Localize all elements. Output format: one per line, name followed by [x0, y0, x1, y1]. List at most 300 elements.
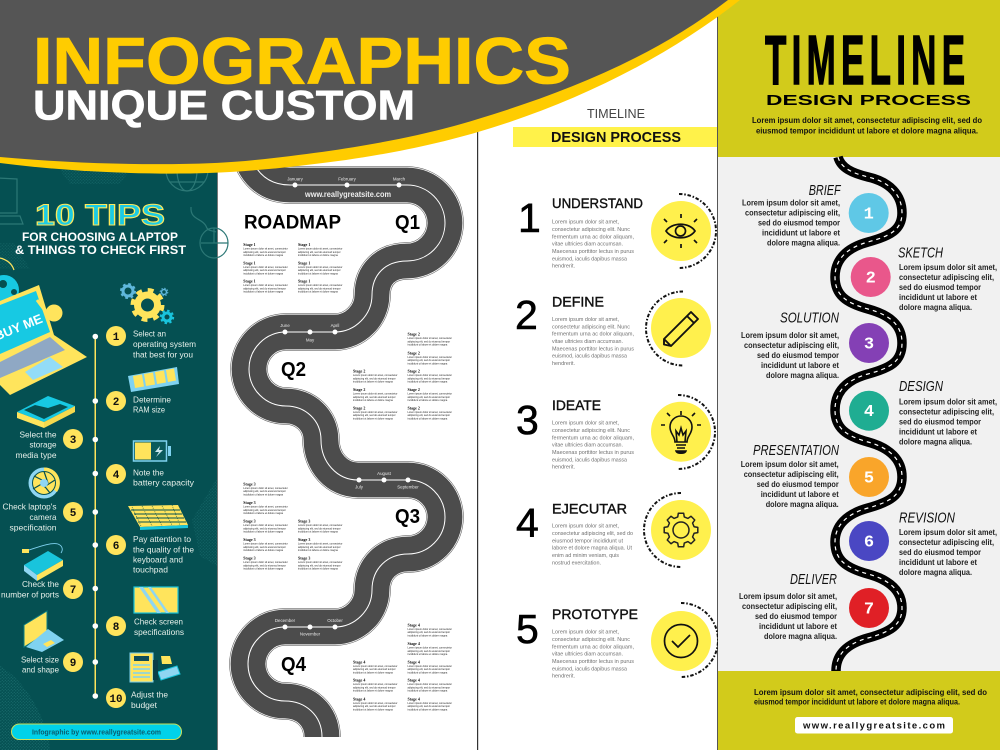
- Q4 stages: incididunt ut labore et dolore magna: [353, 690, 393, 693]
- step 2: 2: [113, 397, 119, 409]
- Q3 stages: incididunt ut labore et dolore magna: [243, 568, 284, 571]
- intro text: eiusmod tempor incididunt ut labore et dolore magna aliqua.: [756, 126, 978, 136]
- step: define: vitae ultricies diam accumsan.: [552, 339, 623, 345]
- Q4 months: [275, 618, 343, 636]
- Q1 stages: incididunt ut labore et dolore magna: [243, 291, 284, 294]
- step 9: and shape: [22, 666, 59, 675]
- step 1: operating system: [133, 340, 196, 349]
- Q3 stages: Stage 3: [243, 537, 256, 542]
- Q1 stages: incididunt ut labore et dolore magna: [298, 291, 338, 294]
- step: solution: 3: [864, 336, 874, 354]
- step: ejecutar: consectetur adipiscing elit, sed do: [552, 531, 633, 537]
- Q3 stages: adipiscing elit, sed do eiusmod tempor: [243, 527, 286, 530]
- website label: www.reallygreatsite.com: [304, 190, 391, 199]
- step: deliver: consectetur adipiscing elit,: [742, 602, 837, 611]
- Q4 stages: adipiscing elit, sed do eiusmod tempor: [408, 705, 450, 708]
- Q1 months: February: [338, 176, 357, 182]
- step: presentation: incididunt ut labore et: [761, 490, 839, 499]
- footer pill: [12, 724, 182, 740]
- Q2 stages: Lorem ipsum dolor sit amet, consectetur: [353, 374, 398, 377]
- step 6: the quality of the: [133, 545, 194, 554]
- Q4 stages: adipiscing elit, sed do eiusmod tempor: [408, 668, 450, 671]
- Q1 months: March: [393, 176, 406, 182]
- Q3 stages: adipiscing elit, sed do eiusmod tempor: [243, 490, 286, 493]
- Q4 stages: Lorem ipsum dolor sit amet, consectetur: [408, 646, 452, 650]
- icon: outline mouse decoration: [191, 207, 228, 258]
- step: understand: vitae ultricies diam accumsan.: [552, 242, 623, 248]
- Q3 stages: adipiscing elit, sed do eiusmod tempor: [298, 546, 341, 549]
- Q2 stages: Stage 2: [353, 405, 365, 410]
- step: define: consectetur adipiscing elit. Nunc: [552, 324, 630, 330]
- step: revision: consectetur adipiscing elit,: [899, 538, 994, 547]
- step 10: 10: [110, 694, 122, 706]
- Q2 stages: adipiscing elit, sed do eiusmod tempor: [353, 414, 396, 417]
- step: ejecutar: 4: [516, 500, 539, 546]
- Q4 stages: Stage 4: [353, 678, 365, 683]
- Q3 months: [355, 471, 419, 490]
- Q1 stages: incididunt ut labore et dolore magna: [243, 254, 284, 257]
- Q1 stages: Lorem ipsum dolor sit amet, consectetur: [298, 248, 343, 250]
- Q3 stages: Lorem ipsum dolor sit amet, consectetur: [243, 542, 288, 546]
- Q2 stages: adipiscing elit, sed do eiusmod tempor: [408, 396, 450, 399]
- Q1 stages: Lorem ipsum dolor sit amet, consectetur: [298, 284, 343, 287]
- Q4 stages: Lorem ipsum dolor sit amet, consectetur: [353, 665, 398, 668]
- step 10: Adjust the: [131, 691, 168, 700]
- icon: light bulb: [661, 411, 701, 453]
- Q3 stages: incididunt ut labore et dolore magna: [243, 493, 284, 496]
- step: ejecutar: enim ad minim veniam, quis: [552, 553, 619, 559]
- step: understand: Maecenas porttitor lectus in purus: [552, 249, 634, 255]
- step 1: that best for you: [133, 350, 193, 359]
- step: prototype: euismod, iaculis dapibus massa: [552, 666, 628, 672]
- Q2 stages: Lorem ipsum dolor sit amet, consectetur: [408, 356, 452, 359]
- website pill: [795, 717, 953, 734]
- step: brief: consectetur adipiscing elit,: [745, 208, 840, 218]
- Q4 stages: Lorem ipsum dolor sit amet, consectetur: [408, 665, 452, 668]
- Q2 stages: Stage 2: [408, 405, 420, 410]
- step: deliver: incididunt ut labore et: [759, 622, 837, 631]
- step: understand: fermentum urna ac dolor aliquam,: [552, 234, 634, 240]
- footer text: eiusmod tempor incididunt ut labore et dolore magna aliqua.: [754, 698, 960, 706]
- Q3 label: Q3: [395, 506, 420, 528]
- step 3: [16, 429, 83, 460]
- Q4 stages: Lorem ipsum dolor sit amet, consectetur: [408, 628, 452, 631]
- Q1 stages: adipiscing elit, sed do eiusmod tempor: [243, 287, 286, 290]
- step: prototype: vitae ultricies diam accumsan.: [552, 652, 623, 658]
- Q2 stages: Lorem ipsum dolor sit amet, consectetur: [353, 411, 398, 414]
- Q4 stages: adipiscing elit, sed do eiusmod tempor: [408, 650, 450, 653]
- Q4 stages: Stage 4: [353, 659, 365, 664]
- Q2 stages: Stage 2: [408, 332, 420, 337]
- step: brief: dolore magna aliqua.: [767, 238, 840, 248]
- step: define: 2: [515, 292, 538, 338]
- Q3 stages: incididunt ut labore et dolore magna: [243, 549, 284, 552]
- Q3 months: July: [355, 484, 364, 490]
- Q4 stages: [353, 622, 452, 711]
- Q2 stages: Stage 2: [353, 369, 365, 374]
- step: presentation: consectetur adipiscing elit,: [744, 470, 839, 479]
- icon: gear: [664, 513, 698, 547]
- step 10: [106, 688, 168, 710]
- Q4 stages: incididunt ut labore et dolore magna: [408, 634, 448, 637]
- step 9: 9: [70, 658, 76, 670]
- step: brief: Lorem ipsum dolor sit amet,: [742, 198, 840, 208]
- step 6: [106, 535, 194, 575]
- Q1 stages: Lorem ipsum dolor sit amet, consectetur: [243, 248, 288, 250]
- step: ejecutar: Lorem ipsum dolor sit amet,: [552, 524, 619, 530]
- step: understand: consectetur adipiscing elit. Nunc: [552, 227, 630, 233]
- step 1: [106, 326, 196, 359]
- Q1 stages: incididunt ut labore et dolore magna: [243, 272, 284, 275]
- Q2 stages: [353, 332, 452, 420]
- Q2 stages: Lorem ipsum dolor sit amet, consectetur: [408, 337, 452, 340]
- step 3: media type: [16, 451, 57, 460]
- Q2 months: June: [280, 323, 290, 328]
- icon: outline laptop decoration: [0, 178, 23, 224]
- step 3: storage: [30, 441, 57, 450]
- step 5: camera: [30, 513, 57, 522]
- step: define: Maecenas porttitor lectus in purus: [552, 346, 634, 352]
- step: prototype: 5: [516, 606, 539, 652]
- step 1: 1: [113, 332, 120, 344]
- Q3 stages: Lorem ipsum dolor sit amet, consectetur: [243, 506, 288, 508]
- step: deliver: Lorem ipsum dolor sit amet,: [739, 592, 837, 601]
- icon: storage drive: [17, 396, 75, 428]
- Q3 stages: adipiscing elit, sed do eiusmod tempor: [243, 546, 286, 549]
- step 6: 6: [113, 541, 119, 553]
- step 6: keyboard and: [133, 555, 183, 564]
- icon: check circle: [664, 624, 698, 658]
- step: ideate: vitae ultricies diam accumsan.: [552, 443, 623, 449]
- step: prototype: Lorem ipsum dolor sit amet,: [552, 630, 619, 636]
- step: deliver: DELIVER: [790, 571, 837, 588]
- Q1 stages: Stage 1: [243, 279, 256, 284]
- Q2 months: [280, 323, 339, 342]
- Q4 stages: incididunt ut labore et dolore magna: [353, 708, 393, 711]
- step: design: incididunt ut labore et: [899, 428, 977, 436]
- timeline spine: [92, 334, 98, 699]
- Q4 stages: Stage 4: [408, 641, 420, 646]
- step: design: DESIGN: [899, 378, 943, 395]
- step 7: 7: [70, 585, 76, 597]
- Q2 stages: incididunt ut labore et dolore magna: [353, 381, 393, 384]
- Q2 label: Q2: [281, 359, 306, 381]
- step 10: budget: [131, 701, 158, 710]
- design process banner: DESIGN PROCESS: [551, 129, 681, 146]
- design process subtitle: DESIGN PROCESS: [766, 92, 971, 109]
- step 9: Select size: [21, 655, 59, 664]
- Q4 months: December: [275, 618, 296, 623]
- step 2: Determine: [133, 395, 171, 404]
- Q4 stages: Lorem ipsum dolor sit amet, consectetur: [353, 702, 398, 705]
- Q4 stages: adipiscing elit, sed do eiusmod tempor: [353, 686, 396, 689]
- Q1 stages: Stage 1: [243, 242, 256, 247]
- step: sketch: incididunt ut labore et: [899, 293, 977, 302]
- step: prototype: consectetur adipiscing elit. Nunc: [552, 637, 630, 643]
- Q1 label: Q1: [395, 212, 420, 234]
- Q1 stages: incididunt ut labore et dolore magna: [298, 272, 338, 275]
- icon: calculator and money: [130, 653, 180, 682]
- Q1 stages: adipiscing elit, sed do eiusmod tempor: [243, 269, 286, 272]
- Q2 stages: Lorem ipsum dolor sit amet, consectetur: [408, 411, 452, 414]
- step: revision: incididunt ut labore et: [899, 558, 977, 567]
- Q3 stages: Lorem ipsum dolor sit amet, consectetur: [298, 561, 343, 564]
- Q2 stages: Lorem ipsum dolor sit amet, consectetur: [408, 374, 452, 377]
- step 5: [2, 502, 83, 532]
- Q3 stages: Lorem ipsum dolor sit amet, consectetur: [243, 561, 288, 564]
- step 2: [106, 391, 171, 415]
- step: deliver: dolore magna aliqua.: [764, 632, 837, 641]
- step 2: RAM size: [133, 406, 165, 415]
- panel: design process steps: [477, 15, 718, 750]
- Q3 stages: Stage 3: [243, 481, 256, 486]
- step 4: [106, 464, 195, 488]
- icon: battery: [134, 441, 171, 461]
- footer text: Lorem ipsum dolor sit amet, consectetur adipiscing elit, sed do: [754, 688, 987, 697]
- Q3 stages: [243, 481, 343, 571]
- step: revision: dolore magna aliqua.: [899, 568, 972, 577]
- step 4: battery capacity: [133, 479, 195, 488]
- Q2 stages: incididunt ut labore et dolore magna: [408, 344, 448, 347]
- step: ideate: euismod, iaculis dapibus massa: [552, 457, 628, 463]
- step: ejecutar: labore et dolore magna aliqua. Ut: [552, 546, 632, 552]
- icon: pencil: [664, 312, 698, 346]
- Q1 stages: adipiscing elit, sed do eiusmod tempor: [243, 251, 286, 254]
- step: design: consectetur adipiscing elit,: [899, 408, 994, 416]
- Q2 stages: Stage 2: [408, 387, 420, 392]
- Q4 stages: Stage 4: [353, 696, 365, 701]
- step: presentation: PRESENTATION: [753, 442, 839, 459]
- icon: camera lens: [28, 467, 60, 498]
- icon: RAM module: [128, 367, 179, 392]
- step: presentation: dolore magna aliqua.: [766, 500, 839, 509]
- roadmap title: ROADMAP: [244, 212, 341, 234]
- step: brief: 1: [864, 206, 874, 224]
- Q1 stages: Stage 1: [298, 260, 310, 265]
- main title: INFOGRAPHICS: [33, 24, 571, 98]
- step: ideate: fermentum urna ac dolor aliquam,: [552, 435, 634, 441]
- icon: screen: [134, 587, 178, 613]
- step: prototype: fermentum urna ac dolor aliquam,: [552, 644, 634, 650]
- step: solution: sed do eiusmod tempor: [757, 351, 839, 360]
- step: design: 4: [864, 403, 874, 422]
- footer text: [754, 688, 987, 706]
- heading: 10 tips: 10 TIPS: [35, 199, 165, 232]
- Q3 stages: Stage 3: [243, 519, 256, 524]
- road: [248, 155, 445, 737]
- step: brief: incididunt ut labore et: [762, 228, 840, 238]
- step 7: number of ports: [1, 590, 59, 599]
- design process banner: [513, 127, 717, 147]
- Q2 stages: adipiscing elit, sed do eiusmod tempor: [408, 340, 450, 343]
- Q4 stages: incididunt ut labore et dolore magna: [353, 671, 393, 674]
- step: define: [515, 292, 711, 367]
- Q4 stages: Lorem ipsum dolor sit amet, consectetur: [408, 683, 452, 686]
- step: solution: SOLUTION: [780, 310, 839, 327]
- Q4 stages: Lorem ipsum dolor sit amet, consectetur: [353, 683, 398, 686]
- step: ideate: IDEATE: [552, 397, 601, 413]
- subheading: for choosing a laptop: & THINGS TO CHECK FIRST: [15, 243, 187, 257]
- step: brief: BRIEF: [809, 182, 841, 199]
- step: design: sed do eiusmod tempor: [899, 418, 981, 426]
- Q3 stages: Stage 3: [298, 556, 310, 561]
- Q3 stages: incididunt ut labore et dolore magna: [298, 549, 338, 552]
- step 8: Check screen: [134, 618, 183, 627]
- Q4 label: Q4: [281, 654, 307, 676]
- Q2 stages: incididunt ut labore et dolore magna: [408, 362, 448, 365]
- icon: small laptop: [24, 611, 64, 652]
- Q4 stages: Stage 4: [408, 696, 420, 701]
- Q2 stages: incididunt ut labore et dolore magna: [408, 381, 448, 384]
- step: prototype: PROTOTYPE: [552, 606, 638, 622]
- icon: keyboard: [128, 505, 188, 530]
- step: solution: incididunt ut labore et: [761, 361, 839, 370]
- Q4 stages: incididunt ut labore et dolore magna: [408, 653, 448, 656]
- Q1 stages: Lorem ipsum dolor sit amet, consectetur: [243, 266, 288, 269]
- step: understand: UNDERSTAND: [552, 195, 643, 211]
- icon: eye: [664, 214, 697, 248]
- step: understand: hendrerit.: [552, 264, 575, 270]
- step: solution: dolore magna aliqua.: [766, 371, 839, 380]
- Q4 stages: Lorem ipsum dolor sit amet, consectetur: [408, 702, 452, 705]
- step 4: Note the: [133, 468, 164, 477]
- step: brief: [742, 182, 889, 248]
- Q3 stages: incididunt ut labore et dolore magna: [298, 568, 338, 571]
- step: define: euismod, iaculis dapibus massa: [552, 354, 628, 360]
- step: understand: 1: [518, 195, 541, 241]
- step 6: touchpad: [133, 566, 168, 575]
- step: revision: sed do eiusmod tempor: [899, 548, 981, 557]
- step: define: DEFINE: [552, 294, 604, 310]
- step: sketch: SKETCH: [898, 244, 943, 262]
- Q4 stages: incididunt ut labore et dolore magna: [408, 671, 448, 674]
- winding road: [835, 157, 902, 671]
- Q2 stages: incididunt ut labore et dolore magna: [353, 417, 393, 420]
- step: deliver: 7: [864, 600, 874, 620]
- step: ideate: hendrerit.: [552, 465, 575, 471]
- Q2 stages: Stage 2: [408, 369, 420, 374]
- step: presentation: [741, 442, 889, 509]
- step 7: Check the: [22, 580, 59, 589]
- Q1 stages: Lorem ipsum dolor sit amet, consectetur: [298, 266, 343, 269]
- step 8: [106, 616, 184, 637]
- step: deliver: sed do eiusmod tempor: [755, 612, 837, 621]
- step: brief: sed do eiusmod tempor: [758, 218, 840, 228]
- step: revision: [849, 510, 997, 577]
- Q3 stages: Stage 3: [243, 500, 256, 505]
- Q2 stages: Stage 2: [408, 350, 420, 355]
- Q4 stages: adipiscing elit, sed do eiusmod tempor: [353, 668, 396, 671]
- Q3 stages: Lorem ipsum dolor sit amet, consectetur: [298, 524, 343, 527]
- step: ejecutar: nostrud exercitation.: [552, 560, 601, 566]
- timeline heading: TIMELINE: [587, 107, 645, 121]
- step 1: Select an: [133, 330, 166, 339]
- Q4 stages: Stage 4: [408, 659, 420, 664]
- subtitle: UNIQUE CUSTOM: [33, 82, 415, 128]
- Q2 months: May: [306, 338, 315, 342]
- intro text: [752, 116, 982, 136]
- Q2 stages: Lorem ipsum dolor sit amet, consectetur: [353, 392, 398, 396]
- step: understand: [518, 194, 716, 270]
- footer pill: Infographic by www.reallygreatsite.com: [32, 730, 161, 736]
- Q3 stages: incididunt ut labore et dolore magna: [298, 531, 338, 534]
- step: sketch: [851, 244, 997, 312]
- Q1 stages: Stage 1: [243, 260, 256, 265]
- Q4 stages: adipiscing elit, sed do eiusmod tempor: [353, 705, 396, 708]
- step 5: 5: [70, 508, 77, 520]
- subheading: for choosing a laptop: FOR CHOOSING A LAPTOP: [22, 230, 178, 244]
- step: prototype: hendrerit.: [552, 674, 575, 680]
- step 8: specifications: [134, 628, 184, 637]
- step: solution: consectetur adipiscing elit,: [744, 341, 839, 350]
- Q2 stages: adipiscing elit, sed do eiusmod tempor: [353, 377, 396, 380]
- Q3 stages: Stage 3: [243, 556, 256, 561]
- Q1 stages: adipiscing elit, sed do eiusmod tempor: [298, 251, 341, 254]
- Q2 stages: Stage 2: [353, 387, 365, 392]
- step: ideate: [516, 395, 715, 471]
- step: ejecutar: eiusmod tempor incididunt ut: [552, 538, 623, 544]
- step 7: [1, 579, 83, 599]
- step: presentation: sed do eiusmod tempor: [757, 480, 839, 489]
- step 3: Select the: [20, 430, 57, 439]
- website pill: www.reallygreatsite.com: [802, 720, 945, 732]
- step: sketch: dolore magna aliqua.: [899, 303, 972, 312]
- Q4 months: November: [300, 632, 321, 636]
- icon: ports device: [22, 544, 63, 581]
- icon: large laptop with buy me screen: [0, 258, 87, 395]
- panel: roadmap: [243, 155, 452, 737]
- Q4 stages: adipiscing elit, sed do eiusmod tempor: [408, 686, 450, 689]
- Q4 stages: incididunt ut labore et dolore magna: [408, 708, 448, 711]
- intro text: Lorem ipsum dolor sit amet, consectetur adipiscing elit, sed do: [752, 116, 982, 125]
- step: ideate: Lorem ipsum dolor sit amet,: [552, 421, 619, 427]
- Q1 stages: Lorem ipsum dolor sit amet, consectetur: [243, 284, 288, 287]
- Q2 months: April: [331, 323, 339, 328]
- Q4 stages: Stage 4: [408, 678, 420, 683]
- step 4: 4: [113, 470, 120, 482]
- Q1 stages: Stage 1: [298, 242, 310, 247]
- step: design: [849, 378, 997, 446]
- step: sketch: 2: [866, 270, 876, 288]
- step: prototype: [516, 603, 718, 680]
- step: revision: REVISION: [899, 510, 955, 527]
- step: define: hendrerit.: [552, 361, 575, 367]
- step: presentation: 5: [864, 470, 874, 488]
- step: revision: 6: [864, 534, 874, 552]
- Q2 stages: adipiscing elit, sed do eiusmod tempor: [408, 359, 450, 362]
- Q4 months: October: [327, 618, 343, 623]
- step: ideate: 3: [516, 397, 539, 443]
- Q1 months: January: [287, 176, 304, 182]
- subheading: for choosing a laptop: [15, 230, 187, 257]
- step 8: 8: [113, 622, 120, 634]
- Q4 stages: Stage 4: [408, 622, 420, 627]
- Q4 stages: adipiscing elit, sed do eiusmod tempor: [408, 631, 450, 634]
- panel: 10 tips laptop guide: [0, 149, 228, 750]
- step: define: Lorem ipsum dolor sit amet,: [552, 317, 619, 323]
- icon: outline globe decoration: [166, 149, 208, 191]
- Q3 stages: incididunt ut labore et dolore magna: [243, 512, 284, 515]
- Q3 months: September: [397, 484, 419, 490]
- Q2 stages: incididunt ut labore et dolore magna: [408, 399, 448, 402]
- header banner: [0, 0, 740, 174]
- Q4 stages: incididunt ut labore et dolore magna: [408, 690, 448, 693]
- Q1 stages: Stage 1: [298, 279, 310, 284]
- step: ideate: consectetur adipiscing elit. Nunc: [552, 428, 630, 434]
- Q3 stages: Lorem ipsum dolor sit amet, consectetur: [298, 542, 343, 546]
- icon: gears: [121, 284, 173, 323]
- Q3 stages: adipiscing elit, sed do eiusmod tempor: [243, 564, 286, 567]
